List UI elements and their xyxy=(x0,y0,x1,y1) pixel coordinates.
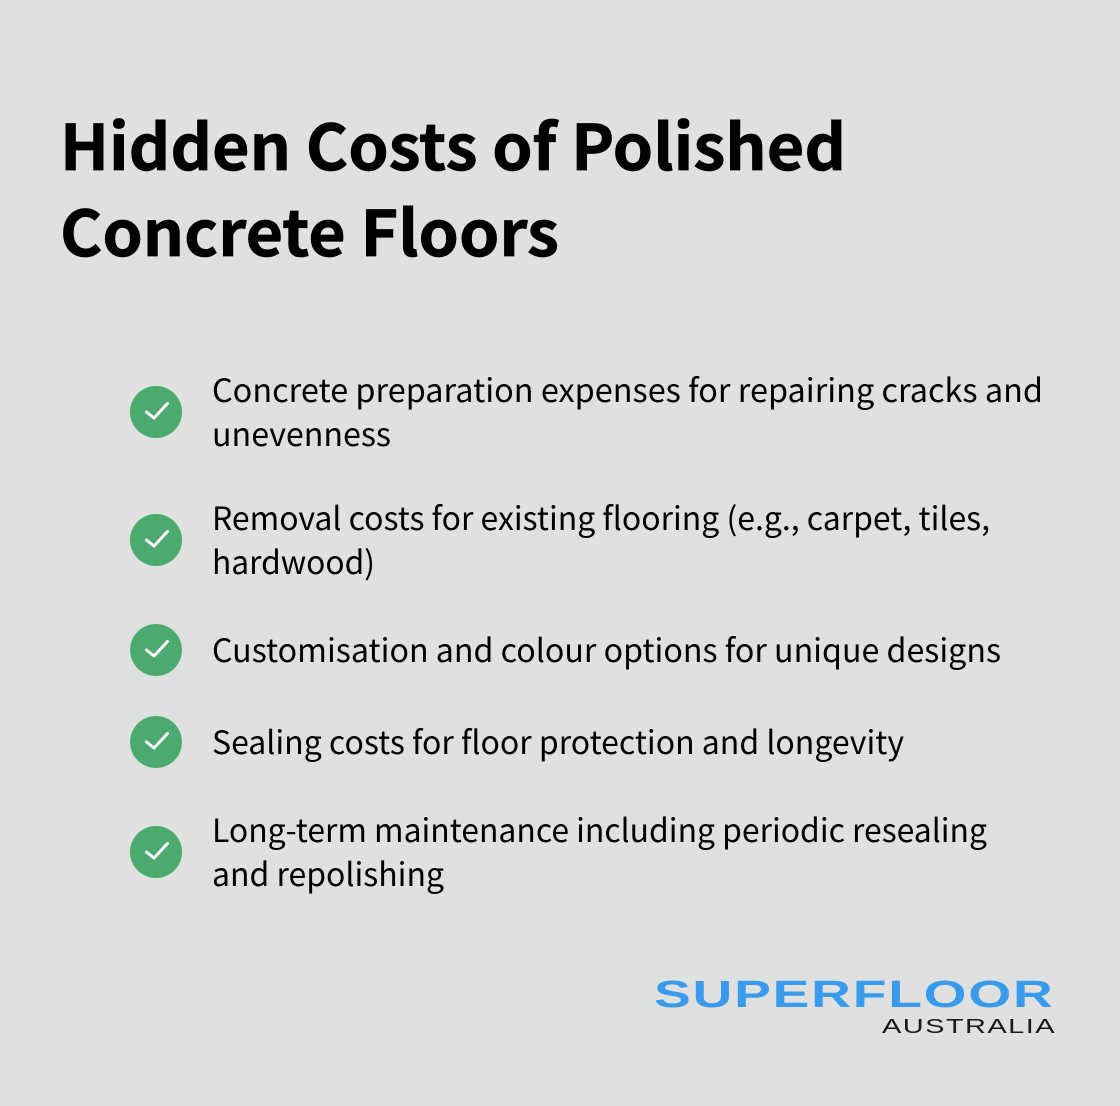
item 5: long-term maintenance xyxy=(130,806,987,896)
logo: Superfloor Australia: AUSTRALIA xyxy=(882,1015,1055,1038)
item 1: concrete preparation xyxy=(130,366,1043,456)
logo: Superfloor Australia xyxy=(654,973,1055,1038)
title xyxy=(60,98,846,275)
title: Hidden Costs of Polished xyxy=(60,98,846,189)
item 1: concrete preparation: unevenness xyxy=(212,410,391,456)
item 5: long-term maintenance: and repolishing xyxy=(212,850,444,896)
item 2: removal costs xyxy=(130,494,990,584)
logo: Superfloor Australia: SUPERFLOOR xyxy=(654,973,1053,1016)
item 2: removal costs: Removal costs for existing flooring (e.g., carpet, tiles, xyxy=(212,494,990,540)
item 2: removal costs: hardwood) xyxy=(212,538,375,584)
item 4: sealing costs: Sealing costs for floor protection and longevity xyxy=(212,718,904,764)
item 3: customisation: Customisation and colour options for unique designs xyxy=(212,626,1001,672)
title: Concrete Floors xyxy=(60,184,559,275)
item 5: long-term maintenance: Long-term maintenance including periodic resealing xyxy=(212,806,987,852)
item 1: concrete preparation: Concrete preparation expenses for repairing cracks and xyxy=(212,366,1043,412)
checklist xyxy=(130,366,1043,896)
